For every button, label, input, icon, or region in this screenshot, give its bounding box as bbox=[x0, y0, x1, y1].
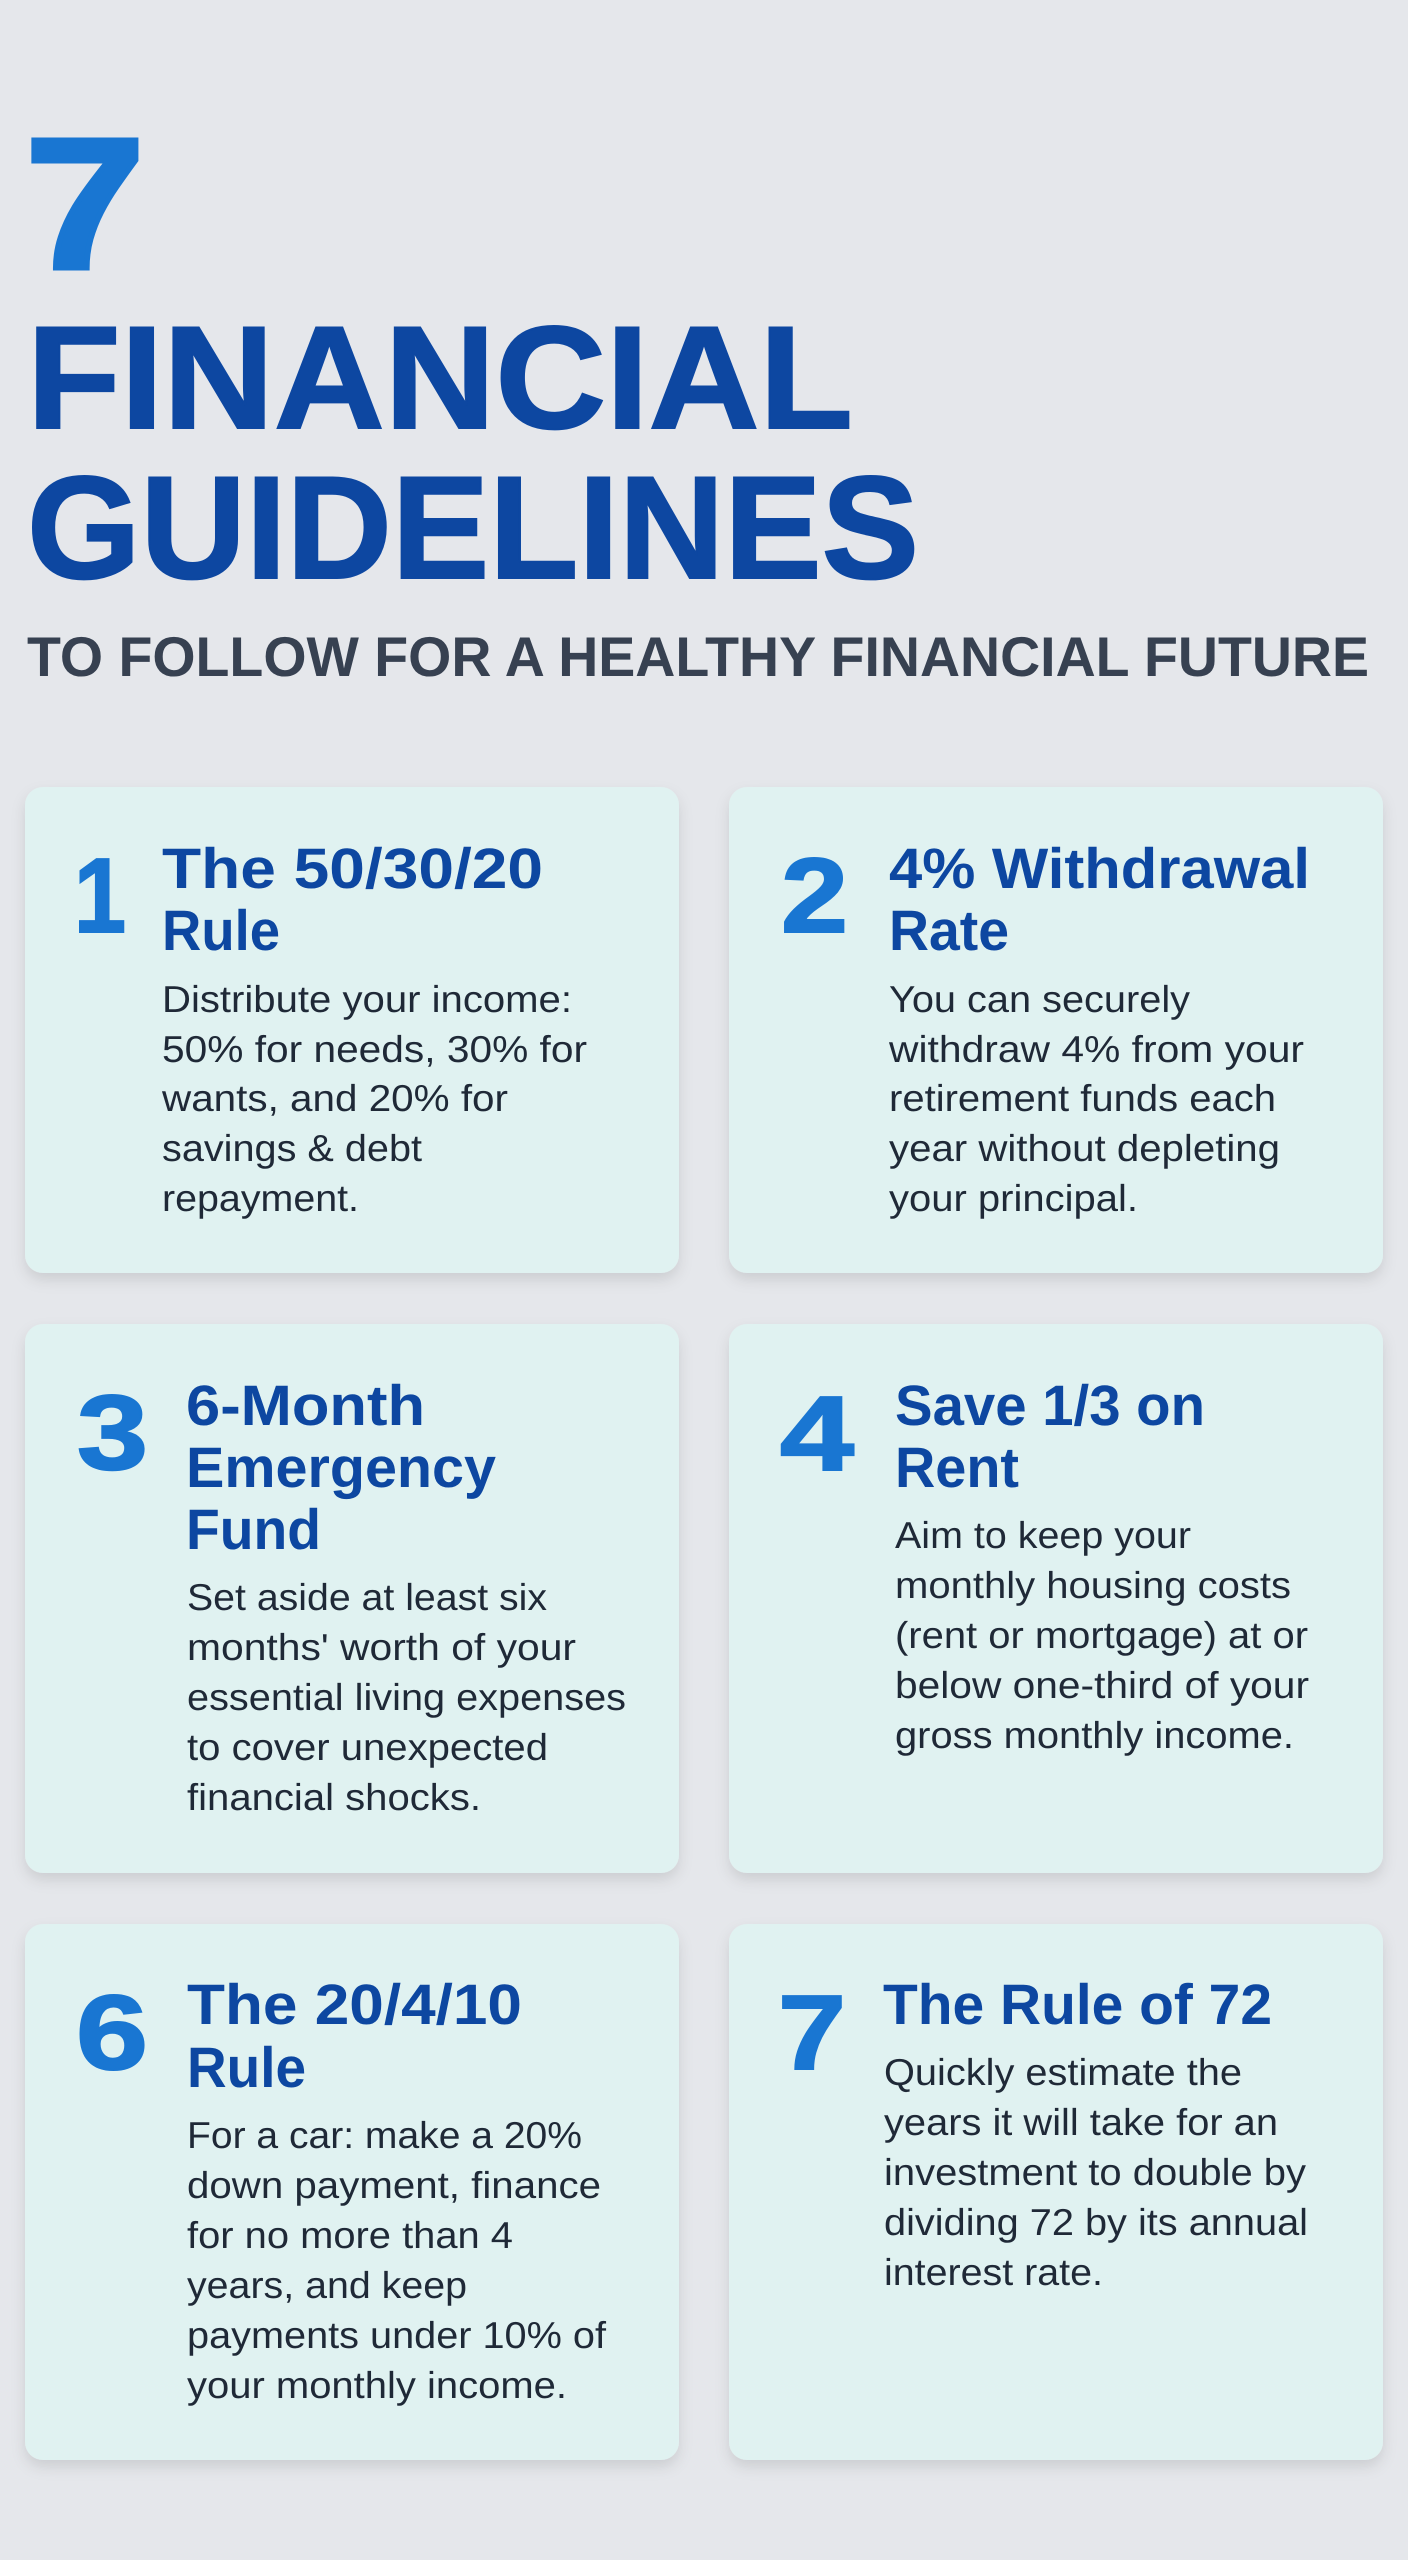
card body: interest rate. bbox=[884, 2251, 1103, 2293]
panel: save 1/3 on rent bbox=[729, 1324, 1383, 1873]
card body: monthly housing costs bbox=[895, 1564, 1291, 1606]
card body: For a car: make a 20% bbox=[187, 2114, 582, 2156]
card body: essential living expenses bbox=[187, 1676, 626, 1718]
card body: financial shocks. bbox=[187, 1776, 481, 1818]
card heading: The Rule of 72 bbox=[883, 1973, 1272, 2037]
card body: your monthly income. bbox=[187, 2364, 567, 2406]
card heading: Rent bbox=[895, 1436, 1019, 1500]
heading: financial guidelines: GUIDELINES bbox=[27, 446, 919, 609]
card body: repayment. bbox=[162, 1177, 359, 1219]
card heading: Save 1/3 on bbox=[895, 1374, 1205, 1438]
card body: Set aside at least six bbox=[187, 1576, 547, 1618]
card heading bbox=[187, 1973, 522, 2100]
card body bbox=[187, 2114, 607, 2406]
card heading: 6-Month bbox=[186, 1374, 425, 1438]
card body: savings & debt bbox=[162, 1127, 423, 1169]
panel: the 20/4/10 rule bbox=[25, 1924, 679, 2460]
card body bbox=[187, 1576, 626, 1818]
card body: for no more than 4 bbox=[187, 2214, 513, 2256]
number 4: 4 bbox=[780, 1375, 854, 1493]
panel: 4% withdrawal rate bbox=[729, 787, 1383, 1273]
card body: down payment, finance bbox=[187, 2164, 601, 2206]
card heading: 4% Withdrawal bbox=[889, 837, 1310, 901]
number 3: 3 bbox=[77, 1374, 148, 1492]
card body: months' worth of your bbox=[187, 1626, 576, 1668]
card body: retirement funds each bbox=[889, 1077, 1276, 1119]
card heading bbox=[895, 1374, 1205, 1500]
card heading bbox=[162, 837, 543, 963]
card body: your principal. bbox=[889, 1177, 1138, 1219]
card body: wants, and 20% for bbox=[161, 1077, 508, 1119]
card body: dividing 72 by its annual bbox=[884, 2201, 1308, 2243]
card body: to cover unexpected bbox=[187, 1726, 548, 1768]
card heading bbox=[186, 1374, 496, 1562]
heading: financial guidelines: FINANCIAL bbox=[27, 296, 853, 459]
card body: years, and keep bbox=[187, 2264, 467, 2306]
number 1: 1 bbox=[74, 837, 126, 955]
card body: You can securely bbox=[889, 978, 1190, 1020]
card body bbox=[161, 978, 587, 1219]
card body: year without depleting bbox=[889, 1127, 1280, 1169]
card body: gross monthly income. bbox=[895, 1714, 1294, 1756]
number 7: 7 bbox=[778, 1974, 846, 2092]
card body: (rent or mortgage) at or bbox=[895, 1614, 1308, 1656]
card body: investment to double by bbox=[884, 2151, 1306, 2193]
card body: payments under 10% of bbox=[187, 2314, 607, 2356]
card heading: Rate bbox=[889, 899, 1009, 963]
card body: Aim to keep your bbox=[895, 1514, 1191, 1556]
card body: withdraw 4% from your bbox=[888, 1028, 1304, 1070]
card heading: Rule bbox=[162, 899, 280, 963]
card heading: Rule bbox=[187, 2036, 306, 2100]
big number seven: 7 bbox=[25, 101, 145, 308]
card body: Distribute your income: bbox=[162, 978, 572, 1020]
number 6: 6 bbox=[76, 1974, 148, 2092]
card heading bbox=[889, 837, 1310, 963]
panel: 6-month emergency fund bbox=[25, 1324, 679, 1873]
card heading: Emergency bbox=[186, 1436, 496, 1500]
subtitle: TO FOLLOW FOR A HEALTHY FINANCIAL FUTURE bbox=[27, 625, 1369, 688]
panel: the 50/30/20 rule bbox=[25, 787, 679, 1273]
card body: below one-third of your bbox=[895, 1664, 1309, 1706]
card body: years it will take for an bbox=[884, 2101, 1278, 2143]
card body: Quickly estimate the bbox=[884, 2051, 1242, 2093]
heading: financial guidelines bbox=[27, 296, 919, 609]
panel: the rule of 72 bbox=[729, 1924, 1383, 2460]
card heading: The 50/30/20 bbox=[162, 837, 543, 901]
title block bbox=[25, 101, 1369, 688]
number 2: 2 bbox=[781, 837, 848, 955]
card body: 50% for needs, 30% for bbox=[162, 1028, 587, 1070]
card body bbox=[895, 1514, 1309, 1756]
card body bbox=[888, 978, 1304, 1219]
card heading: Fund bbox=[186, 1498, 321, 1562]
card body bbox=[884, 2051, 1308, 2293]
card heading: The 20/4/10 bbox=[187, 1973, 522, 2037]
